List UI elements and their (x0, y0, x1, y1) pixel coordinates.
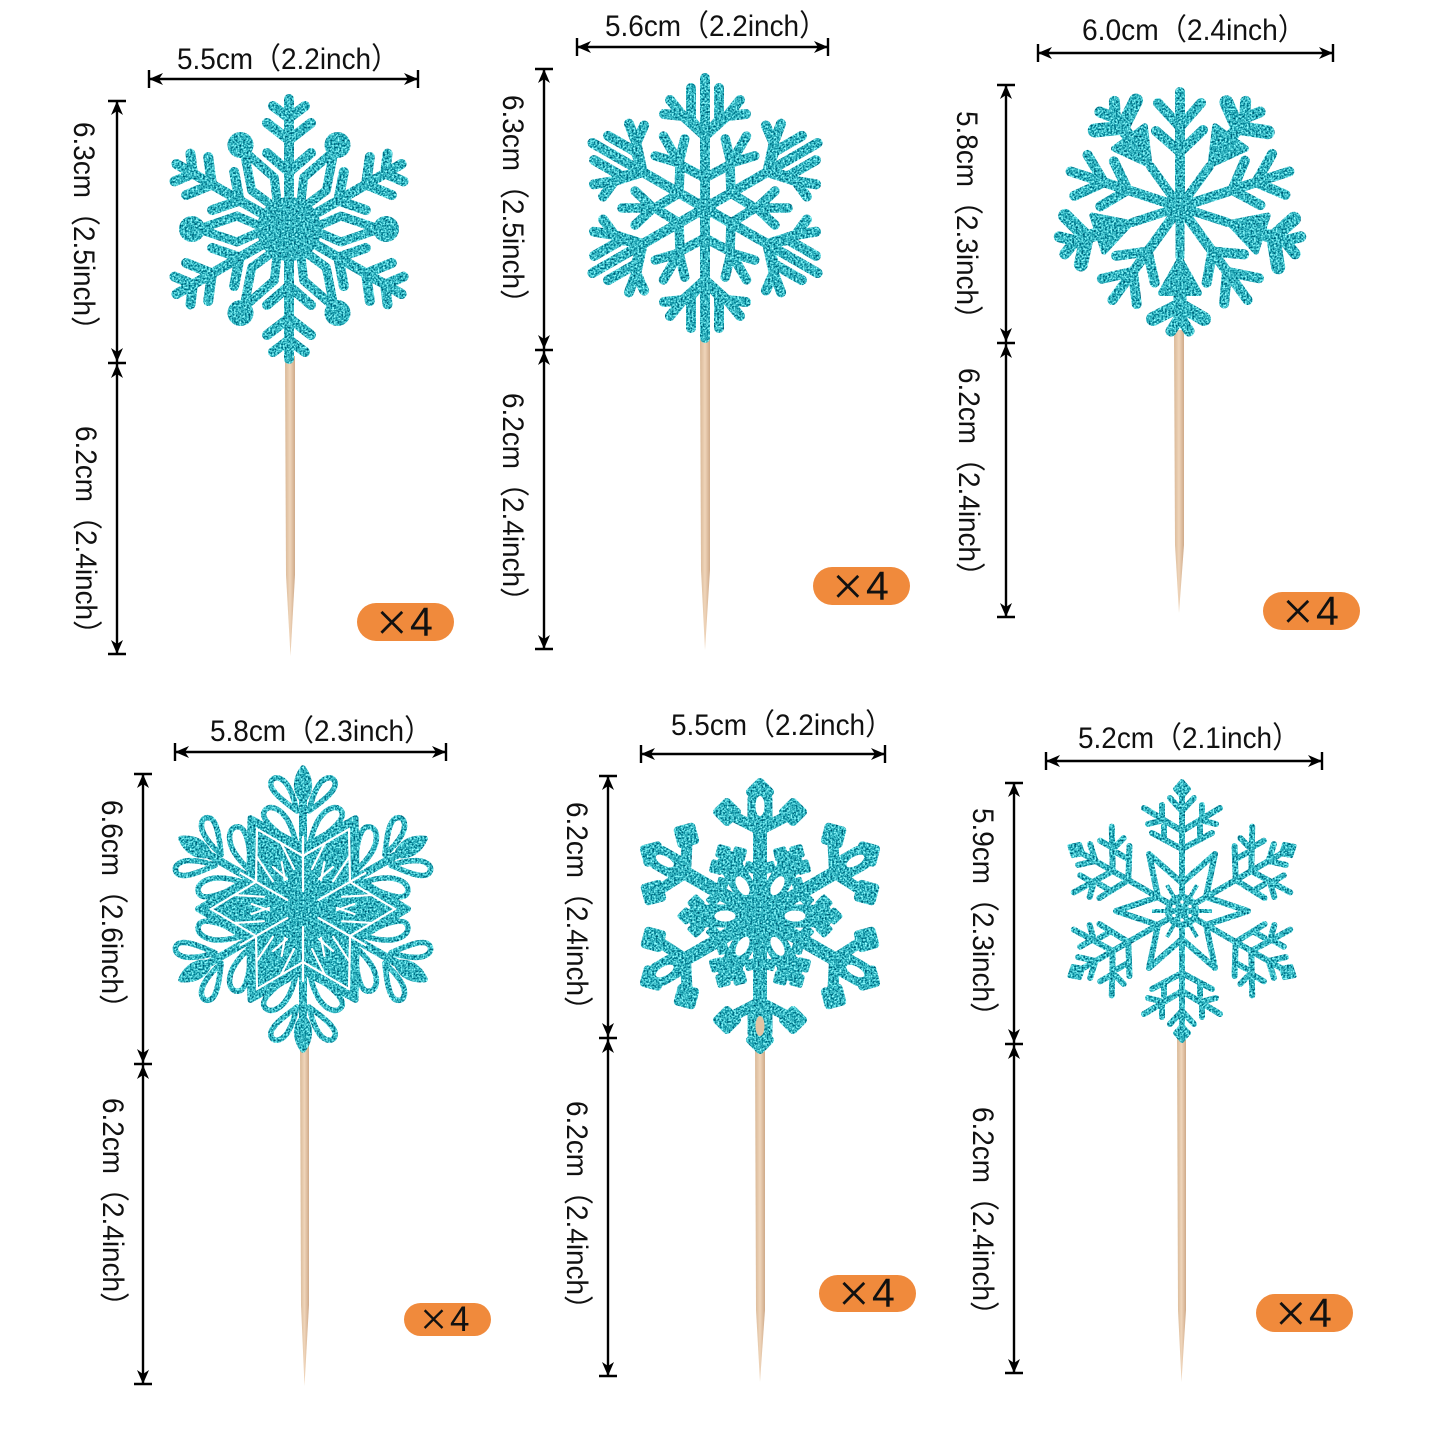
snowflake topper 3 (1054, 91, 1305, 331)
quantity badge 6: 4 (1309, 1290, 1332, 1336)
quantity badge 5 (819, 1263, 916, 1325)
snowflake topper 5 (622, 782, 898, 1050)
height dimension 2 upper (496, 69, 553, 350)
width dimension 2 (577, 10, 828, 56)
width dimension 3: 6.0cm（2.4inch） (1082, 14, 1306, 47)
height dimension 3 upper: 5.8cm（2.3inch） (950, 111, 983, 333)
snowflake topper 2 (572, 78, 838, 338)
width dimension 4: 5.8cm（2.3inch） (210, 715, 432, 748)
quantity badge 2 (813, 556, 910, 618)
snowflake topper 4 (161, 768, 445, 1050)
snowflake topper 1 stick (285, 356, 295, 656)
quantity badge 6 (1256, 1283, 1353, 1345)
height dimension 6 upper (966, 783, 1023, 1044)
height dimension 4 upper (95, 774, 152, 1064)
quantity badge 1 (357, 592, 454, 654)
width dimension 3 (1038, 14, 1333, 62)
quantity badge 5: × (838, 1263, 870, 1325)
quantity badge 1: × (376, 592, 408, 654)
height dimension 5 lower: 6.2cm（2.4inch） (560, 1101, 593, 1323)
snowflake topper 3 stick (1174, 330, 1184, 613)
height dimension 1 upper (67, 101, 126, 363)
snowflake topper 1 (165, 99, 413, 359)
snowflake topper 4 stick (300, 1040, 309, 1386)
quantity badge 3: 4 (1316, 588, 1339, 634)
snowflake topper 6 stick (1177, 1030, 1186, 1382)
quantity badge 4: × (420, 1293, 447, 1346)
width dimension 2: 5.6cm（2.2inch） (605, 10, 827, 43)
width dimension 1 (149, 43, 418, 88)
height dimension 5 upper: 6.2cm（2.4inch） (560, 802, 593, 1024)
height dimension 4 upper: 6.6cm（2.6inch） (95, 800, 128, 1022)
height dimension 5 upper (560, 776, 617, 1038)
height dimension 6 lower: 6.2cm（2.4inch） (966, 1107, 999, 1329)
quantity badge 2: × (832, 556, 864, 618)
quantity badge 3 (1263, 581, 1360, 643)
quantity badge 1: 4 (410, 599, 433, 645)
width dimension 5 (641, 709, 893, 763)
height dimension 2 upper: 6.3cm（2.5inch） (496, 95, 529, 317)
snowflake topper 5 stick (755, 1040, 765, 1382)
quantity badge 3: × (1282, 581, 1314, 643)
height dimension 3 lower: 6.2cm（2.4inch） (952, 368, 985, 590)
quantity badge 2: 4 (866, 563, 889, 609)
height dimension 3 upper (950, 85, 1015, 343)
width dimension 4 (175, 715, 446, 761)
quantity badge 6: × (1275, 1283, 1307, 1345)
height dimension 1 upper: 6.3cm（2.5inch） (67, 122, 100, 344)
quantity badge 5: 4 (872, 1270, 895, 1316)
quantity badge 4 (404, 1293, 491, 1346)
quantity badge 4: 4 (450, 1300, 469, 1339)
width dimension 5: 5.5cm（2.2inch） (671, 709, 893, 742)
width dimension 6 (1046, 722, 1322, 770)
snowflake topper 6 (1050, 781, 1314, 1041)
height dimension 4 lower: 6.2cm（2.4inch） (96, 1098, 129, 1320)
width dimension 1: 5.5cm（2.2inch） (177, 43, 399, 76)
height dimension 2 lower: 6.2cm（2.4inch） (496, 393, 529, 615)
height dimension 6 upper: 5.9cm（2.3inch） (966, 808, 999, 1030)
height dimension 1 lower: 6.2cm（2.4inch） (69, 426, 102, 648)
width dimension 6: 5.2cm（2.1inch） (1078, 722, 1300, 755)
snowflake topper 2 stick (700, 335, 710, 650)
